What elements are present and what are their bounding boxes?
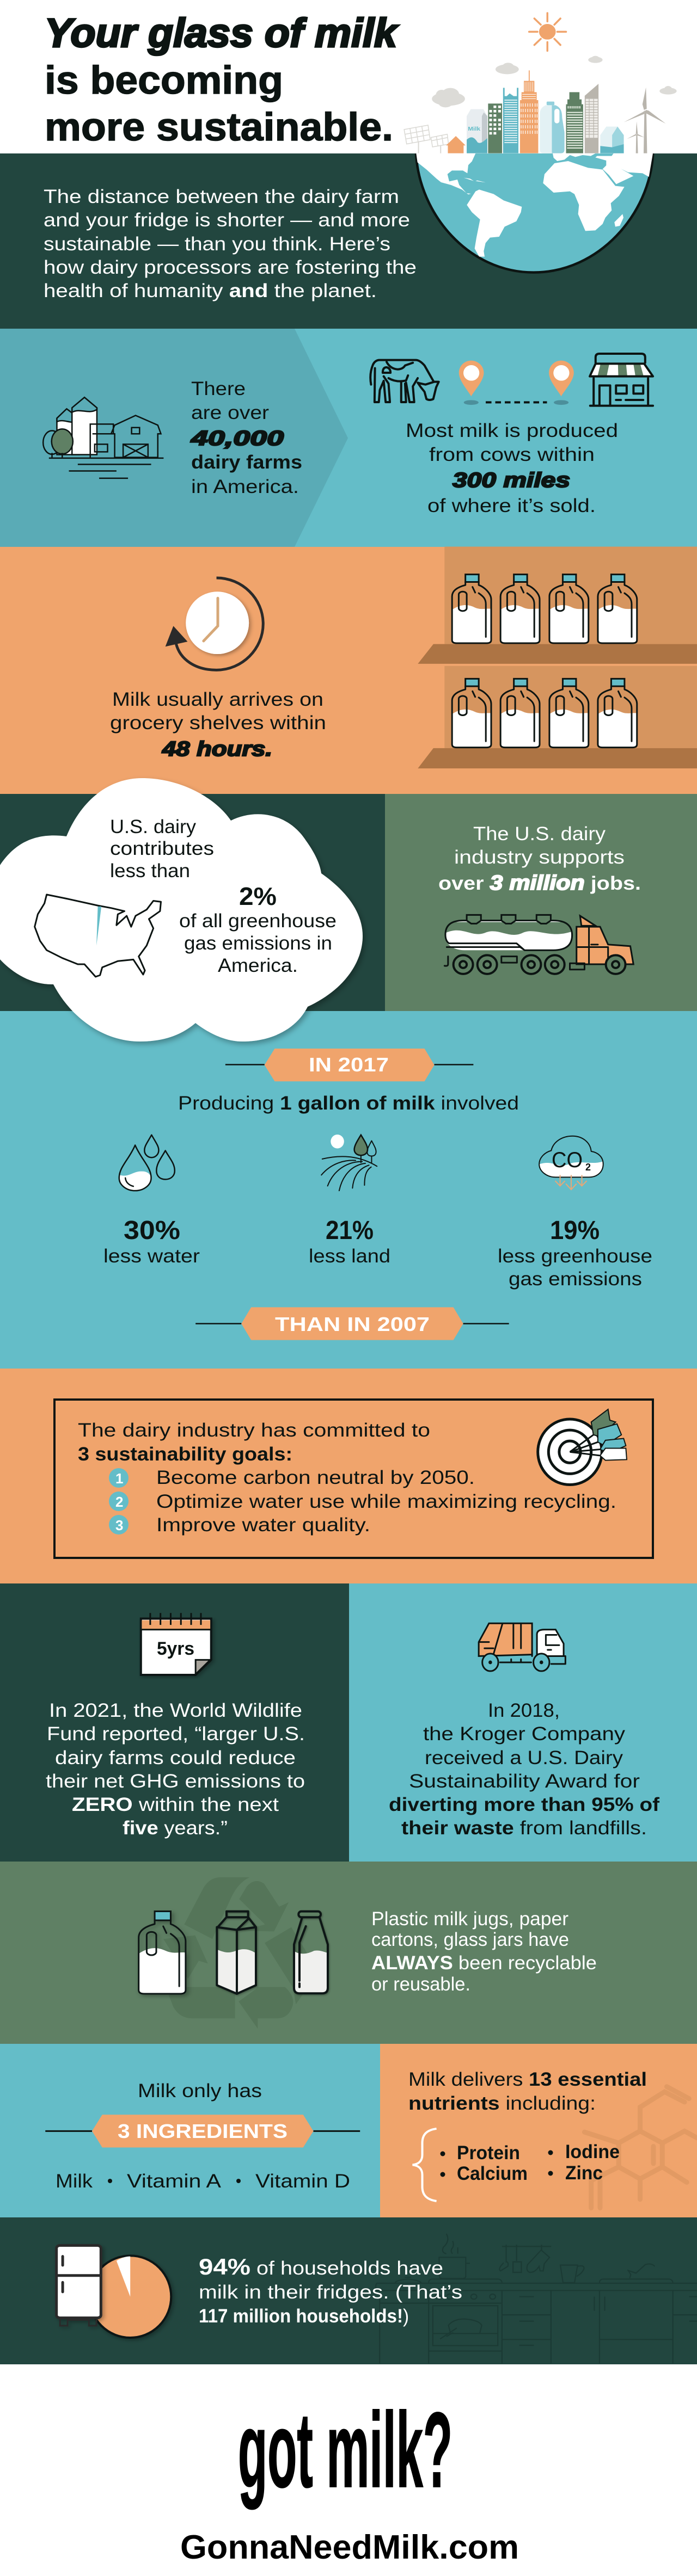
text block: nutrients (408, 2069, 647, 2114)
title: Your glass of milk (45, 10, 399, 56)
text block: dairy contributes: contributes (110, 838, 214, 859)
panel: farms and distance (0, 329, 697, 547)
icon: milk carton (217, 1912, 256, 1994)
title: more sustainable. (45, 106, 393, 149)
text block: distance: of where it’s sold. (427, 495, 596, 516)
icon: store (590, 354, 653, 406)
icon: US map (35, 895, 161, 977)
text block: wwf quote: their net GHG emissions to (46, 1771, 305, 1792)
text block: distance: from cows within (429, 444, 595, 465)
icon: target with arrows (538, 1409, 627, 1485)
ribbon: in 2017 (225, 1049, 473, 1081)
arrow panel: farm count (0, 329, 348, 547)
list: nutrients: Calcium (457, 2163, 528, 2184)
text block: nutrients: Milk delivers 13 essential (408, 2069, 647, 2090)
icon: milk carton building (467, 109, 487, 153)
panel: 3 ingredients (0, 2044, 380, 2217)
text block: dairy contributes (110, 816, 214, 882)
callout: cloud with emissions fact (0, 778, 363, 1042)
text block: intro: and your fridge is shorter — and more (44, 209, 410, 231)
text block: distance: Most milk is produced (406, 420, 618, 441)
text block: kroger award: received a U.S. Dairy (425, 1747, 623, 1768)
panel: intro (0, 153, 697, 329)
icon: house (446, 136, 466, 153)
text block: farm count: There (191, 378, 246, 399)
icon: clock (166, 578, 263, 670)
text block: 48 hours (110, 689, 326, 761)
text block: households: 94% of households have (199, 2254, 443, 2279)
panel: 48 hours (0, 547, 697, 794)
text block: wwf quote: ZERO within the next (72, 1794, 279, 1815)
text block: kroger award: Sustainability Award for (409, 1771, 640, 1792)
list: ingredients: Vitamin A (127, 2171, 222, 2192)
icon: farm (43, 397, 163, 478)
ribbon: than in 2007 (195, 1307, 509, 1340)
text: producing 1 gallon: Producing 1 gallon of milk involved (178, 1093, 519, 1114)
text block: farm count: 40,000 (191, 427, 284, 450)
icon: shelves with milk jugs (418, 547, 697, 768)
panel: emissions stats (0, 1011, 697, 1369)
icon: solar panels (404, 125, 449, 153)
icon: grey tower (585, 84, 598, 153)
text block: distance (406, 420, 618, 516)
text block: kroger award: In 2018, (488, 1700, 560, 1721)
panel: footer (0, 2364, 697, 2576)
ribbon: in 2017: IN 2017 (309, 1053, 389, 1076)
box: goals (54, 1400, 653, 1558)
icon: calendar (141, 1613, 211, 1675)
icon: green tower (488, 103, 502, 153)
text block: intro: how dairy processors are fostering the (44, 257, 417, 278)
list item: goal 3: Improve water quality. (156, 1514, 370, 1536)
icon: milk carton building: Milk (468, 126, 480, 132)
stat: less greenhouse gas: less greenhouse (498, 1246, 652, 1267)
text block: 2 percent: 2% (239, 882, 277, 910)
text block: dairy contributes: U.S. dairy (110, 816, 197, 837)
panel: kroger award (349, 1583, 697, 1862)
text block: goals intro (78, 1420, 430, 1465)
url: GonnaNeedMilk.com: GonnaNeedMilk.com (180, 2529, 519, 2566)
text: milk only has: Milk only has (138, 2080, 262, 2102)
stat: less water: less water (103, 1246, 200, 1267)
list: nutrients: Iodine (565, 2141, 620, 2162)
text block: nutrients: nutrients including: (408, 2093, 596, 2114)
title: is becoming (45, 59, 283, 102)
stat: less greenhouse gas: 19% (550, 1216, 600, 1245)
icon: orange tower (520, 70, 538, 153)
icon: white brace (413, 2129, 437, 2201)
text: 5yrs: 5yrs (157, 1638, 194, 1659)
text: CO2 subscript: 2 (585, 1162, 591, 1173)
panel: sustainability goals (0, 1369, 697, 1583)
text block: 2 percent: gas emissions in (184, 933, 332, 954)
text block: kroger award: diverting more than 95% of (389, 1794, 659, 1815)
panel: jobs (385, 794, 697, 1011)
stat: less water (103, 1216, 200, 1267)
text block: goals intro: The dairy industry has committed to (78, 1420, 430, 1441)
icon: clouds (432, 56, 677, 107)
ribbon: 3 ingredients: 3 INGREDIENTS (118, 2120, 288, 2142)
text block: households (199, 2254, 462, 2327)
icon: cow (370, 360, 439, 402)
text block: recyclable (371, 1908, 597, 1995)
text block: kroger award (389, 1700, 659, 1839)
list item: goal 3: 3 (115, 1517, 123, 1533)
icon: recycle symbol (163, 1877, 320, 2029)
list item: goal 2: 2 (115, 1494, 123, 1510)
panel: 13 nutrients (380, 2044, 697, 2217)
list: nutrients (440, 2141, 620, 2184)
text: CO2 label: CO (552, 1148, 583, 1172)
text block: intro (44, 186, 417, 301)
list: ingredients: Vitamin D (255, 2171, 350, 2192)
text block: kroger award: the Kroger Company (423, 1723, 626, 1745)
list: ingredients (56, 2171, 350, 2192)
text block: 48 hours: Milk usually arrives on (112, 689, 323, 710)
text block: farm count: are over (191, 402, 269, 423)
text block: farm count: in America. (191, 476, 299, 497)
text block: wwf quote (46, 1700, 305, 1839)
text block: wwf quote: dairy farms could reduce (55, 1747, 296, 1768)
icon: kitchen watermark (376, 2234, 697, 2363)
list item: goal 1: 1 (115, 1470, 123, 1487)
icon: CO2 cloud (539, 1136, 603, 1190)
ribbon: than in 2007: THAN IN 2007 (275, 1313, 430, 1335)
panel: dairy emissions background (0, 794, 385, 1011)
text block: farm count: dairy farms (191, 452, 302, 473)
stat: less greenhouse gas: gas emissions (509, 1268, 642, 1290)
text block: recyclable: or reusable. (371, 1974, 470, 1995)
text block: recyclable: Plastic milk jugs, paper (371, 1908, 568, 1930)
text block: wwf quote: five years.” (123, 1817, 228, 1839)
text block: jobs: over 3 million jobs. (438, 872, 641, 895)
text block: farm count (191, 378, 302, 497)
icon: teal tower (503, 88, 518, 153)
text block: recyclable: ALWAYS been recyclable (371, 1952, 597, 1974)
text block: goals intro: 3 sustainability goals: (78, 1444, 292, 1465)
icon: small milk carton (600, 127, 624, 153)
list: nutrients: Protein (457, 2142, 520, 2164)
panel: world wildlife fund (0, 1583, 349, 1862)
stat: less land: 21% (326, 1216, 374, 1245)
text block: intro: sustainable — than you think. Here’s (44, 233, 390, 255)
icon: field and trees (321, 1135, 377, 1191)
text block: 2 percent (179, 882, 337, 976)
list: nutrients: Zinc (565, 2162, 603, 2184)
text block: 2 percent: of all greenhouse (179, 910, 337, 932)
ribbon: 3 ingredients (45, 2115, 360, 2147)
text block: households: milk in their fridges. (That’s (199, 2282, 462, 2303)
panel: recyclable packaging (0, 1862, 697, 2044)
text block: jobs: The U.S. dairy (473, 823, 606, 845)
text block: households: 117 million households!) (199, 2306, 409, 2327)
icon: globe (416, 153, 653, 273)
text block: 48 hours: 48 hours. (162, 738, 272, 761)
icon: water drops (119, 1135, 175, 1191)
text block: intro: health of humanity and the planet. (44, 280, 377, 301)
list item: goal 1: Become carbon neutral by 2050. (156, 1467, 475, 1488)
icon: molecule watermark (584, 2087, 697, 2208)
icon: wind turbines (624, 88, 666, 153)
text block: intro: The distance between the dairy farm (44, 186, 399, 207)
text block: dairy contributes: less than (110, 860, 190, 882)
stat: less land: less land (309, 1246, 390, 1267)
icon: milk jug (139, 1911, 186, 1994)
icon: garbage truck (479, 1623, 565, 1671)
panel: title (0, 0, 697, 153)
text block: jobs (438, 823, 641, 895)
text block: jobs: industry supports (454, 847, 625, 868)
title (45, 10, 399, 149)
icon: milk jug building (540, 102, 565, 153)
icon: sun (529, 13, 566, 51)
icon: location pins and route (459, 361, 574, 405)
stat: less land (309, 1216, 390, 1267)
icon: fridge (57, 2246, 101, 2326)
icon: milk bottle (294, 1912, 328, 1993)
text block: wwf quote: Fund reported, “larger U.S. (47, 1723, 305, 1745)
icon: green striped tower (566, 92, 583, 153)
list item: goal 2: Optimize water use while maximizing recycling. (156, 1491, 616, 1512)
panel: households (0, 2217, 697, 2364)
text block: kroger award: their waste from landfills. (401, 1817, 647, 1839)
icon: milk tanker truck (444, 915, 633, 974)
text block: 48 hours: grocery shelves within (110, 712, 326, 734)
icon: city skyline with sun, clouds and windmills (404, 13, 677, 153)
stat: less water: 30% (124, 1216, 180, 1245)
icon: pie chart 94 percent (89, 2255, 171, 2338)
text block: wwf quote: In 2021, the World Wildlife (49, 1700, 302, 1721)
text block: 2 percent: America. (218, 955, 298, 976)
list: ingredients: Milk (56, 2171, 93, 2192)
text block: recyclable: cartons, glass jars have (371, 1929, 569, 1950)
stat: less greenhouse gas (498, 1216, 652, 1290)
text block: distance: 300 miles (453, 469, 570, 492)
